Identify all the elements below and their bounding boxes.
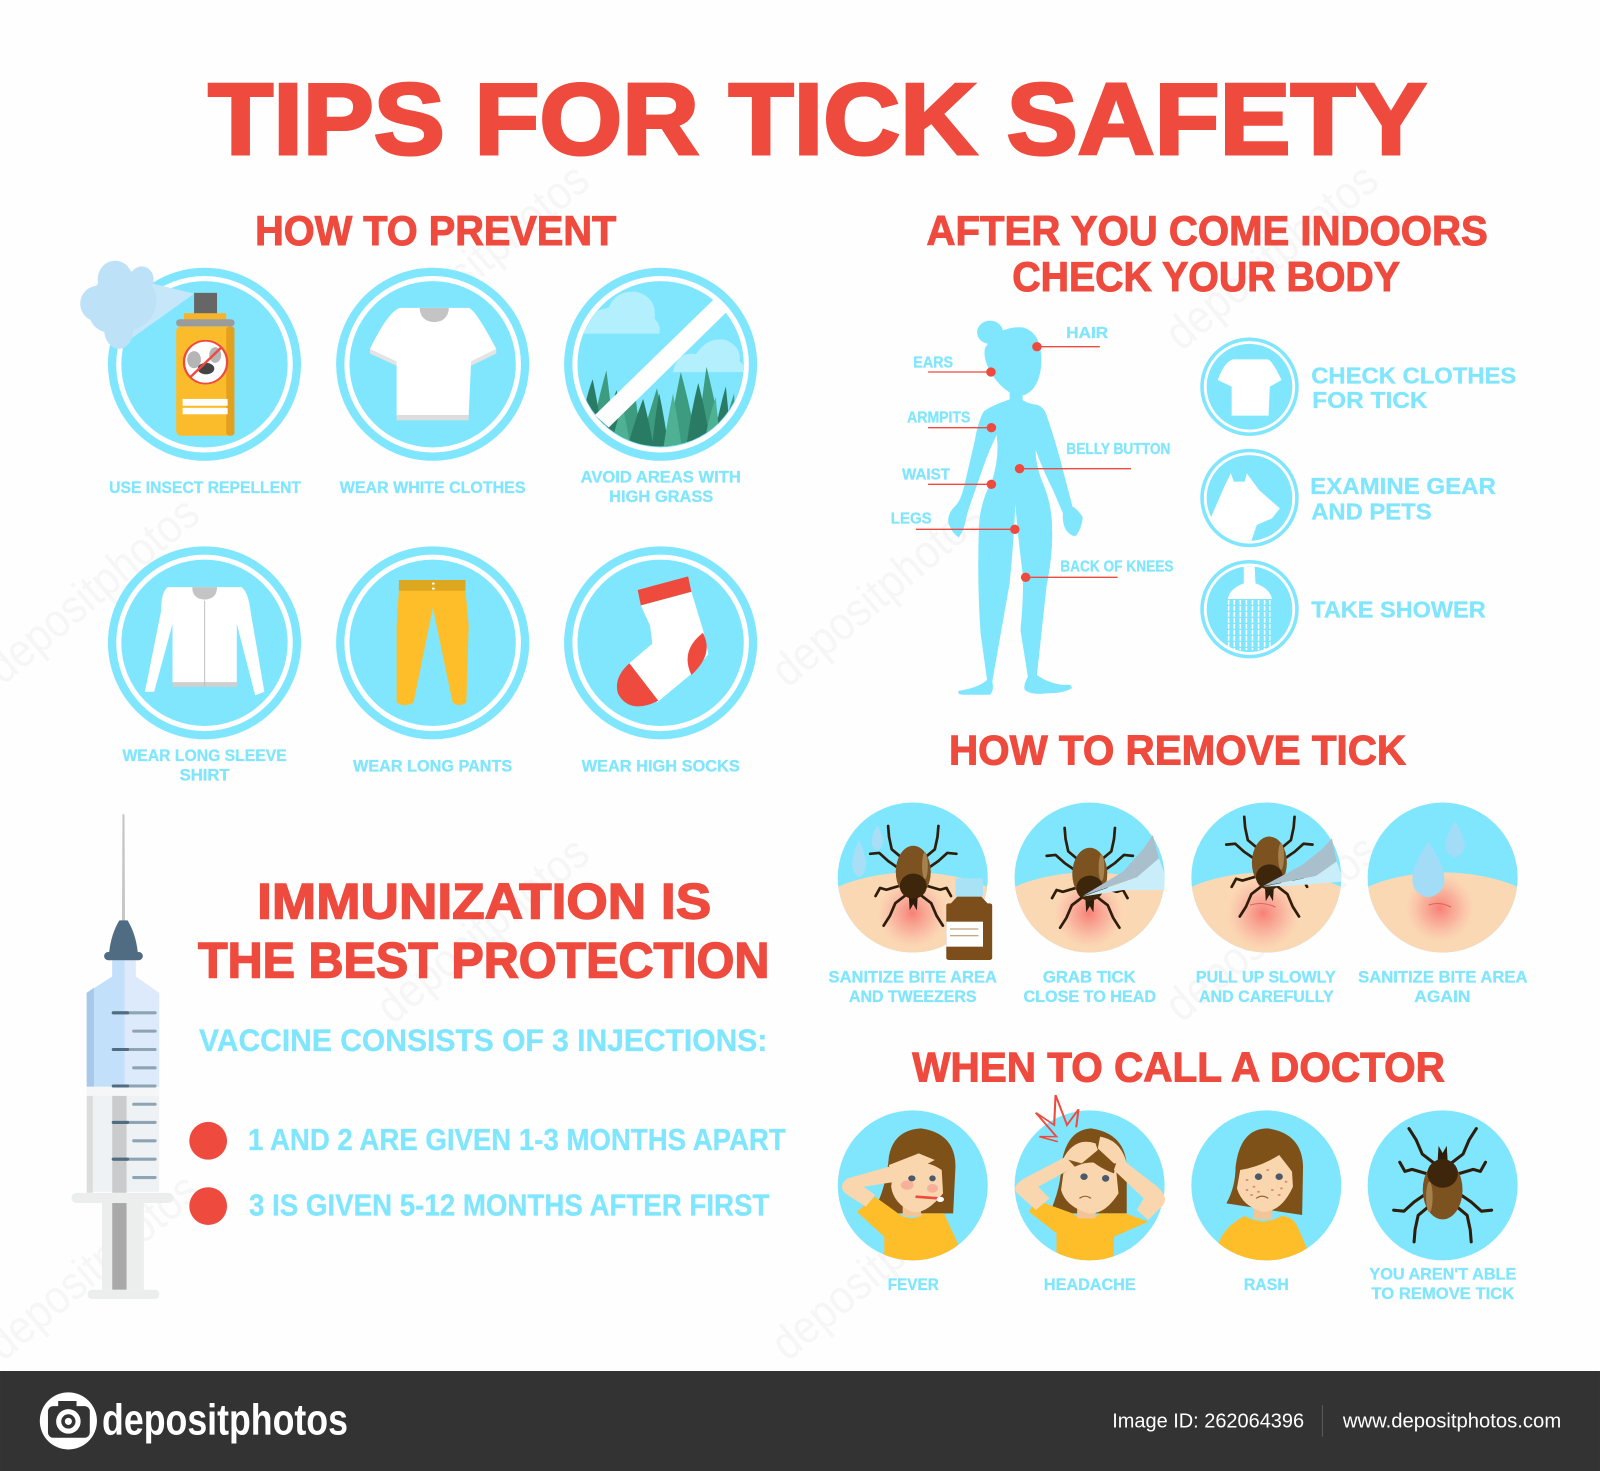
title: TIPS FOR TICK SAFETY (208, 64, 1427, 176)
body part labels: ARMPITS (907, 409, 970, 426)
panel: immunization (71, 814, 786, 1299)
watermark: depositphotos (761, 489, 994, 696)
icon: sanitize with bottle (838, 802, 992, 960)
body part labels: HAIR (1066, 325, 1108, 342)
bullet 1: 1 AND 2 ARE GIVEN 1-3 MONTHS APART (248, 1123, 786, 1157)
text: examine gear and pets: AND PETS (1311, 498, 1432, 524)
label: sanitize bite area again: SANITIZE BITE AREA (1358, 969, 1528, 987)
panel: when to call a doctor (838, 1044, 1518, 1303)
label: you aren't able to remove tick: YOU AREN'T ABLE (1369, 1266, 1516, 1284)
icon: examine pets (1202, 451, 1297, 550)
logo: camera (40, 1392, 97, 1449)
label: grab tick close to head (1023, 969, 1156, 1006)
label: pull up slowly and carefully: AND CAREFULLY (1199, 988, 1334, 1006)
label: pull up slowly and carefully (1196, 969, 1336, 1006)
watermark: depositphotos (1155, 824, 1387, 1031)
body figure with markers (916, 321, 1131, 695)
label: avoid areas with high grass: AVOID AREAS WITH (581, 469, 741, 487)
footer bar (0, 1371, 1600, 1471)
label: you aren't able to remove tick (1369, 1266, 1516, 1303)
text: check clothes for tick: CHECK CLOTHES (1311, 363, 1516, 389)
label: sanitize bite area and tweezers (829, 969, 997, 1006)
bullet 2: 3 IS GIVEN 5-12 MONTHS AFTER FIRST (249, 1188, 770, 1222)
label: sanitize bite area again: AGAIN (1414, 988, 1470, 1006)
icon: high sock (564, 546, 757, 739)
label: sanitize bite area and tweezers: SANITIZE BITE AREA (829, 969, 997, 987)
icon: headache (1015, 1095, 1165, 1263)
text: take shower: TAKE SHOWER (1311, 596, 1486, 622)
heading: when to call a doctor: WHEN TO CALL A DOCTOR (912, 1044, 1445, 1091)
icon: avoid high grass (564, 268, 757, 461)
label: pull up slowly and carefully: PULL UP SLOWLY (1196, 969, 1336, 987)
text: vaccine consists of 3 injections: VACCINE CONSISTS OF 3 INJECTIONS: (199, 1022, 767, 1058)
label: avoid areas with high grass (581, 469, 741, 506)
panel: how to prevent (80, 207, 757, 785)
watermark: depositphotos (366, 826, 599, 1033)
heading: immunization is the best protection: IMMUNIZATION IS (257, 873, 711, 929)
heading: after you come indoors (927, 207, 1488, 300)
body part labels (891, 325, 1173, 575)
text: check clothes for tick: FOR TICK (1312, 387, 1428, 413)
icon: tick (1368, 1110, 1518, 1260)
image id: Image ID: 262064396 (1112, 1411, 1304, 1433)
body part labels: EARS (913, 354, 953, 371)
label: avoid areas with high grass: HIGH GRASS (609, 488, 713, 506)
icon: shower (1202, 562, 1297, 657)
icon: fever (838, 1110, 988, 1263)
logo text: depositphotos (102, 1396, 348, 1445)
icon: insect repellent (80, 261, 301, 461)
watermark (0, 153, 1387, 1370)
body part labels: BACK OF KNEES (1060, 558, 1173, 575)
icon: rash (1191, 1110, 1341, 1263)
label: wear long pants: WEAR LONG PANTS (353, 757, 512, 775)
icon: syringe (71, 814, 173, 1299)
body part labels: BELLY BUTTON (1066, 441, 1170, 458)
watermark: depositphotos (366, 153, 599, 360)
label: wear high socks: WEAR HIGH SOCKS (582, 757, 740, 775)
label: use insect repellent: USE INSECT REPELLENT (109, 479, 301, 497)
icon: white t-shirt (336, 268, 529, 461)
heading: immunization is the best protection (198, 873, 769, 989)
icon: grab tick with tweezers (1014, 802, 1165, 952)
icon: long pants (336, 546, 529, 739)
heading: after you come indoors: CHECK YOUR BODY (1012, 253, 1400, 300)
label: headache: HEADACHE (1044, 1276, 1136, 1294)
heading: immunization is the best protection: THE BEST PROTECTION (198, 933, 769, 989)
text: check clothes for tick (1311, 363, 1516, 413)
text: examine gear and pets (1310, 473, 1496, 524)
label: wear long sleeve shirt: SHIRT (180, 767, 230, 785)
watermark: depositphotos (1155, 153, 1387, 360)
body part labels: WAIST (902, 467, 951, 484)
heading: after you come indoors: AFTER YOU COME INDOORS (927, 207, 1488, 254)
icon: sanitize again (1368, 802, 1518, 952)
label: grab tick close to head: CLOSE TO HEAD (1023, 988, 1156, 1006)
label: sanitize bite area and tweezers: AND TWEEZERS (849, 988, 977, 1006)
label: wear long sleeve shirt (122, 747, 287, 785)
label: fever: FEVER (888, 1276, 939, 1294)
label: you aren't able to remove tick: TO REMOVE TICK (1371, 1285, 1514, 1303)
body part labels: LEGS (891, 510, 932, 527)
panel: check your body (891, 207, 1516, 695)
website: www.depositphotos.com (1342, 1411, 1561, 1433)
heading: how to remove tick: HOW TO REMOVE TICK (949, 726, 1406, 773)
icon: check clothes (1202, 339, 1297, 434)
label: grab tick close to head: GRAB TICK (1043, 969, 1136, 987)
watermark: depositphotos (761, 1163, 994, 1370)
label: sanitize bite area again (1358, 969, 1528, 1006)
label: wear long sleeve shirt: WEAR LONG SLEEVE (122, 747, 287, 765)
label: rash: RASH (1244, 1276, 1289, 1294)
label: wear white clothes: WEAR WHITE CLOTHES (340, 479, 526, 497)
text: examine gear and pets: EXAMINE GEAR (1310, 473, 1496, 499)
heading: how to prevent: HOW TO PREVENT (255, 207, 617, 254)
icon: pull up slowly (1191, 802, 1342, 952)
icon: long sleeve shirt (108, 546, 301, 739)
panel: how to remove tick (828, 735, 1528, 1002)
